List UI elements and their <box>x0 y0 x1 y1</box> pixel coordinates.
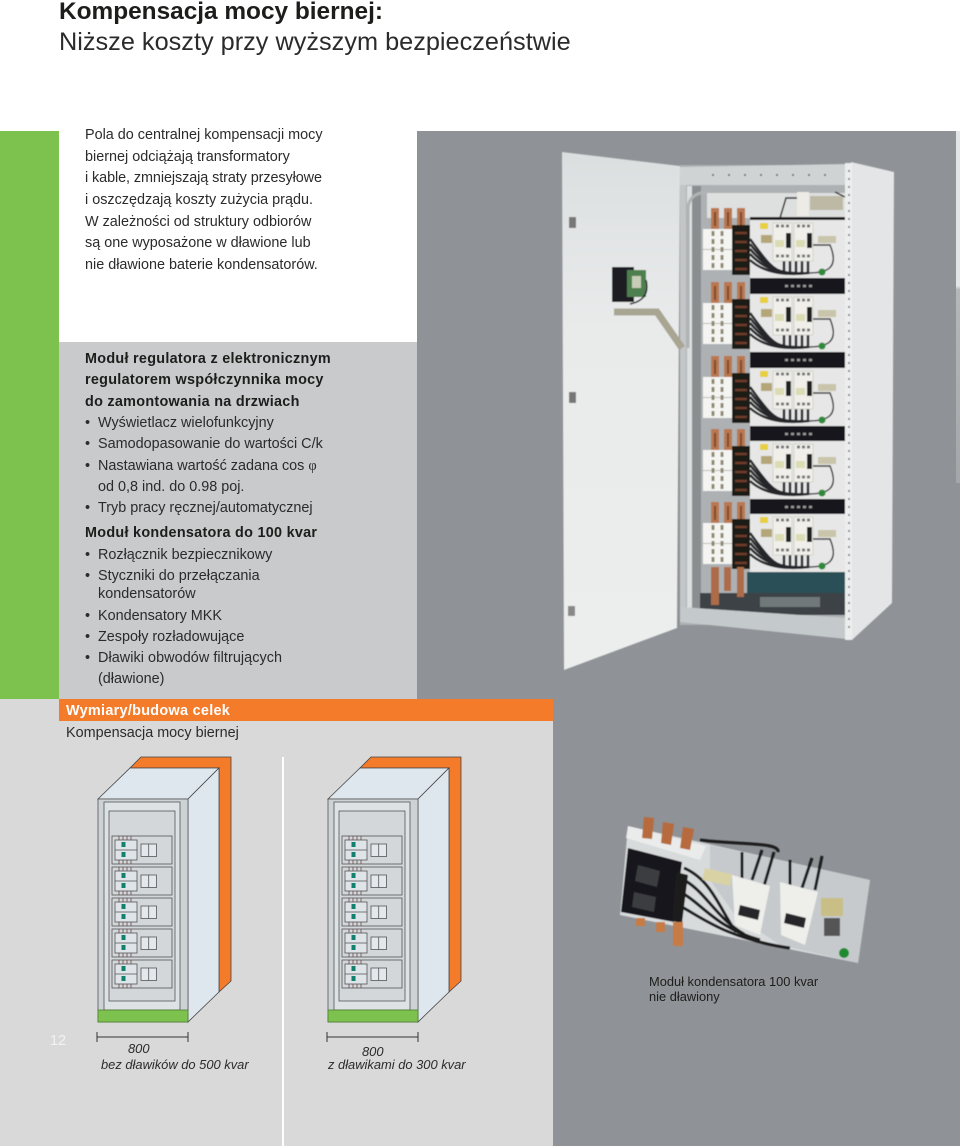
panel: lower light grey section <box>0 699 553 1146</box>
lower section <box>747 572 845 593</box>
door <box>562 152 680 670</box>
label: right cabinet dimension: z dławikami do 300 kvar <box>328 1057 466 1072</box>
text block: regulator module: do zamontowania na drzwiach <box>85 394 300 410</box>
text block: capacitor module: Moduł kondensatora do 100 kvar <box>85 525 317 541</box>
top copper terminals <box>642 817 694 850</box>
text block: regulator module: • <box>85 415 90 431</box>
cables <box>680 840 822 948</box>
text block: regulator module: regulatorem współczynnika mocy <box>85 372 324 388</box>
text block: capacitor module: Styczniki do przełączania <box>98 568 260 584</box>
right side panel <box>851 162 894 640</box>
panel: orange heading bar <box>59 699 553 721</box>
heading: dimensions section: Wymiary/budowa celek <box>66 703 230 719</box>
text: section subheading: Kompensacja mocy biernej <box>66 725 239 741</box>
text block: introduction: W zależności od struktury odbiorów <box>85 214 311 230</box>
text block: capacitor module: • <box>85 629 90 645</box>
text block: introduction: nie dławione baterie kondensatorów. <box>85 257 318 273</box>
text block: capacitor module: Kondensatory MKK <box>98 608 222 624</box>
photo: open capacitor cabinet <box>562 152 894 670</box>
text block: introduction: Pola do centralnej kompensacji mocy <box>85 127 323 143</box>
text block: capacitor module <box>85 525 317 687</box>
title <box>59 0 571 56</box>
diagram: cabinet with reactors <box>328 757 461 1022</box>
text block: capacitor module: Rozłącznik bezpiecznikowy <box>98 547 272 563</box>
text block: capacitor module: kondensatorów <box>98 586 196 602</box>
divider between cabinets <box>282 757 284 1146</box>
door frame <box>680 183 686 621</box>
text block: capacitor module: Dławiki obwodów filtrujących <box>98 650 282 666</box>
caption: capacitor module photo <box>649 974 818 1004</box>
text block: capacitor module: Zespoły rozładowujące <box>98 629 244 645</box>
contactors <box>732 875 770 935</box>
text block: introduction: i kable, zmniejszają straty przesyłowe <box>85 170 322 186</box>
text block: introduction: są one wyposażone w dławione lub <box>85 235 311 251</box>
panel: light grey specification panel <box>59 342 417 699</box>
text block: introduction: i oszczędzają koszty zużycia prądu. <box>85 192 313 208</box>
fuse switch <box>621 848 682 922</box>
text block: regulator module: od 0,8 ind. do 0.98 poj. <box>98 479 244 495</box>
caption: capacitor module photo: Moduł kondensatora 100 kvar <box>649 974 818 989</box>
door hinges <box>569 217 576 228</box>
label: left cabinet dimension: 800 <box>128 1041 150 1056</box>
lower copper terminals <box>636 918 683 946</box>
text block: regulator module: Nastawiana wartość zadana cos φ <box>98 458 317 474</box>
label: left cabinet dimension: bez dławików do 500 kvar <box>101 1057 249 1072</box>
dimension line: right cabinet <box>327 1032 418 1042</box>
text block: capacitor module: • <box>85 608 90 624</box>
caption: capacitor module photo: nie dławiony <box>649 989 720 1004</box>
text block: regulator module: • <box>85 500 90 516</box>
text block: regulator module <box>85 351 331 516</box>
text block: capacitor module: • <box>85 547 90 563</box>
panel: green sidebar <box>0 131 59 699</box>
text block: regulator module: Wyświetlacz wielofunkcyjny <box>98 415 274 431</box>
text block: regulator module: • <box>85 436 90 452</box>
text block: capacitor module: (dławione) <box>98 671 164 687</box>
text block: introduction: biernej odciążają transformatory <box>85 149 290 165</box>
text block: introduction <box>85 127 323 273</box>
cabinet interior <box>680 165 851 625</box>
panel: dark grey background <box>417 131 960 1146</box>
photo: capacitor module <box>620 817 870 963</box>
text block: regulator module: Samodopasowanie do wartości C/k <box>98 436 323 452</box>
diagram: cabinet without reactors <box>98 757 231 1022</box>
panel: right edge strip <box>956 131 960 483</box>
regulator <box>612 267 634 302</box>
base plate <box>680 607 846 639</box>
heading: subtitle: Niższe koszty przy wyższym bezpieczeństwie <box>59 28 571 56</box>
label: left cabinet dimension <box>101 1041 250 1072</box>
label: right cabinet dimension <box>328 1044 466 1072</box>
text block: capacitor module: • <box>85 650 90 666</box>
label: right cabinet dimension: 800 <box>362 1044 384 1059</box>
text block: regulator module: • <box>85 458 90 474</box>
text: page number: 12 <box>50 1033 66 1049</box>
component rows <box>703 208 845 295</box>
text block: regulator module: Moduł regulatora z elektronicznym <box>85 351 331 367</box>
text block: capacitor module: • <box>85 568 90 584</box>
top rail <box>680 164 846 185</box>
text block: regulator module: Tryb pracy ręcznej/automatycznej <box>98 500 313 516</box>
dimension line: left cabinet <box>97 1032 188 1042</box>
